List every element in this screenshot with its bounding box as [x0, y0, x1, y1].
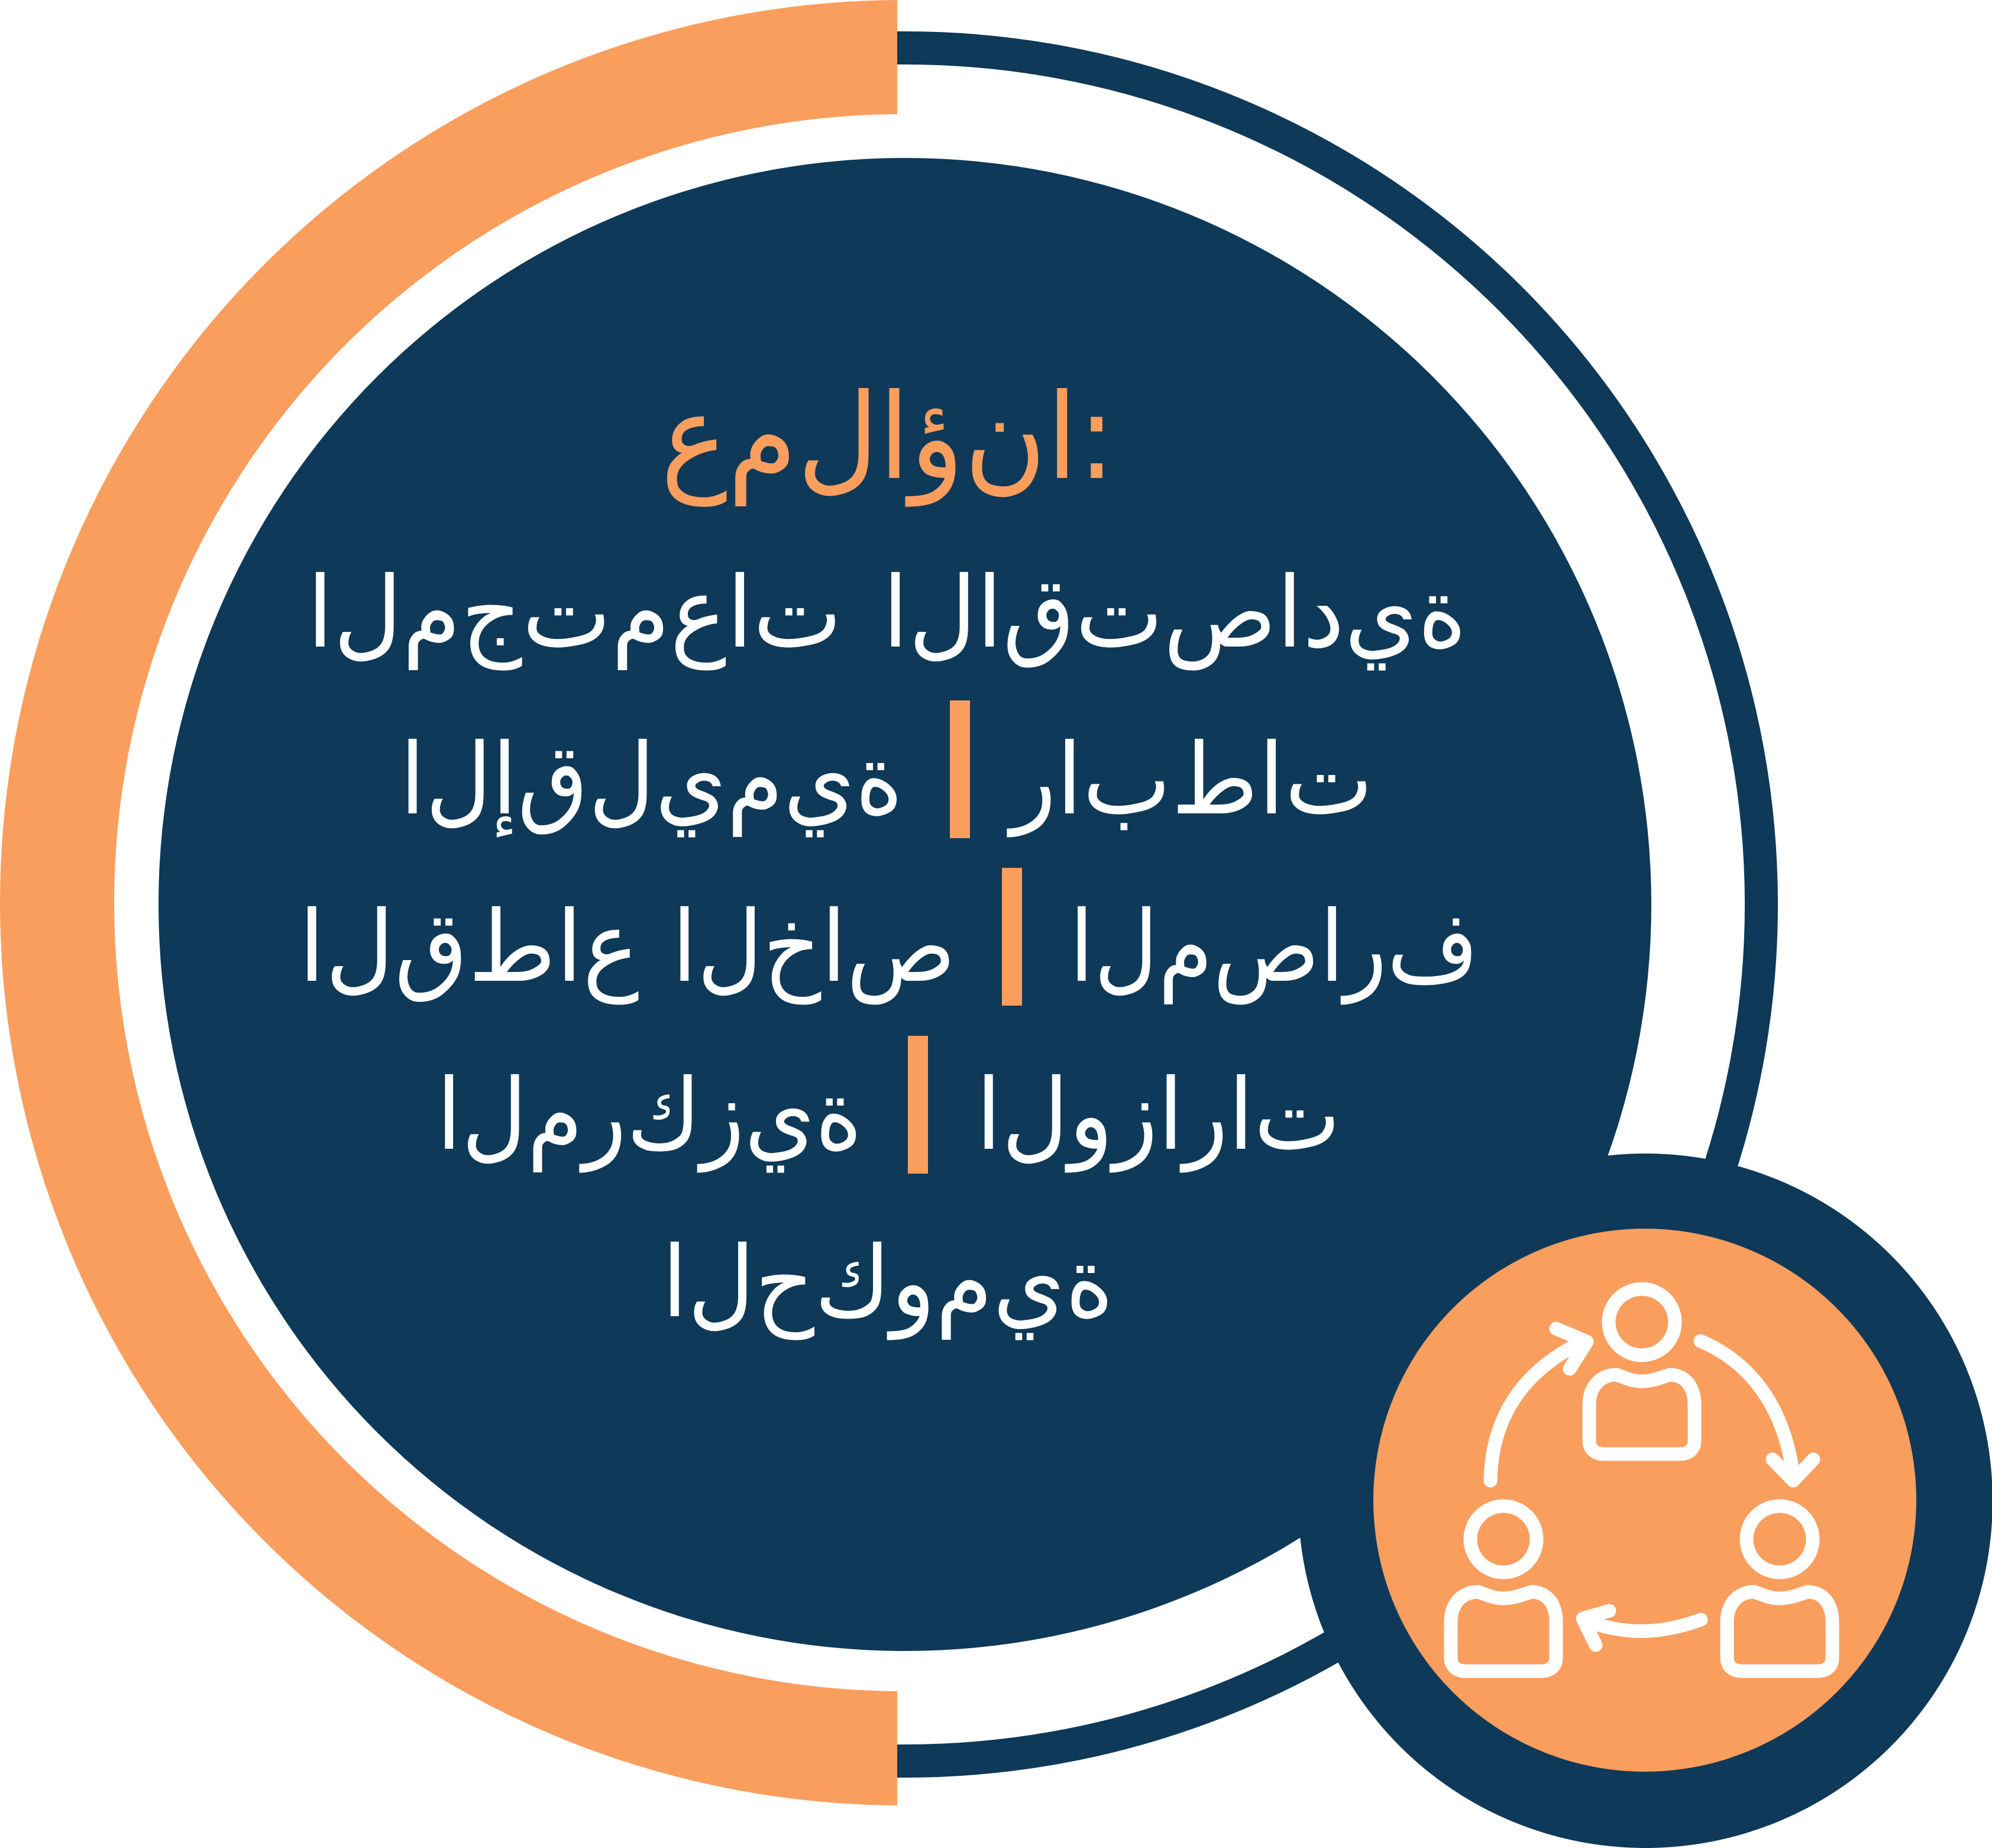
separator bar 2 [1002, 868, 1022, 1006]
arrow: bottom going left [1583, 1611, 1701, 1645]
line 4 word: central: ا‌ل‌م‌ر‌ك‌ز‌ي‌ة [436, 1058, 862, 1173]
line 2 word: regional: ا‌ل‌إ‌ق‌ل‌ي‌م‌ي‌ة [400, 723, 903, 838]
person bottom left [1451, 1506, 1556, 1671]
orange half ring [0, 0, 897, 1805]
navy outer ring [897, 31, 1778, 1778]
main navy circle panel [159, 158, 1651, 1651]
arrow: right going down [1700, 1341, 1813, 1481]
line 1 word: communities: ا‌ل‌م‌ج‌ت‌م‌ع‌ا‌ت [307, 556, 842, 671]
line 3 word: sector: ا‌ل‌ق‌ط‌ا‌ع [299, 890, 639, 1005]
line 3 word: private: ا‌ل‌خ‌ا‌ص [672, 890, 956, 1005]
line 3 word: banks: ا‌ل‌م‌ص‌ا‌ر‌ف [1069, 890, 1479, 1005]
icon: three people exchanging in a cycle [1451, 1289, 1832, 1671]
line 5 word: government: ا‌ل‌ح‌ك‌و‌م‌ي‌ة [662, 1226, 1114, 1340]
text block: client list [299, 556, 1479, 1340]
separator bar 1 [950, 700, 970, 838]
separator bar 3 [908, 1036, 928, 1174]
arrow: left going up [1490, 1329, 1587, 1481]
badge: navy circle [1298, 1154, 1992, 1848]
person top [1589, 1289, 1695, 1454]
line 2 word: associations: ر‌ا‌ب‌ط‌ا‌ت [1007, 723, 1373, 838]
person bottom right [1727, 1506, 1832, 1671]
heading: our clients: ع‌م‌ل‌ا‌ؤ‌ن‌ا‌: [661, 369, 1115, 507]
line 1 word: economic: ا‌ل‌ا‌ق‌ت‌ص‌ا‌د‌ي‌ة [882, 556, 1467, 671]
line 4 word: ministries: ا‌ل‌و‌ز‌ا‌ر‌ا‌ت [976, 1058, 1341, 1173]
badge: orange circle [1373, 1229, 1916, 1772]
